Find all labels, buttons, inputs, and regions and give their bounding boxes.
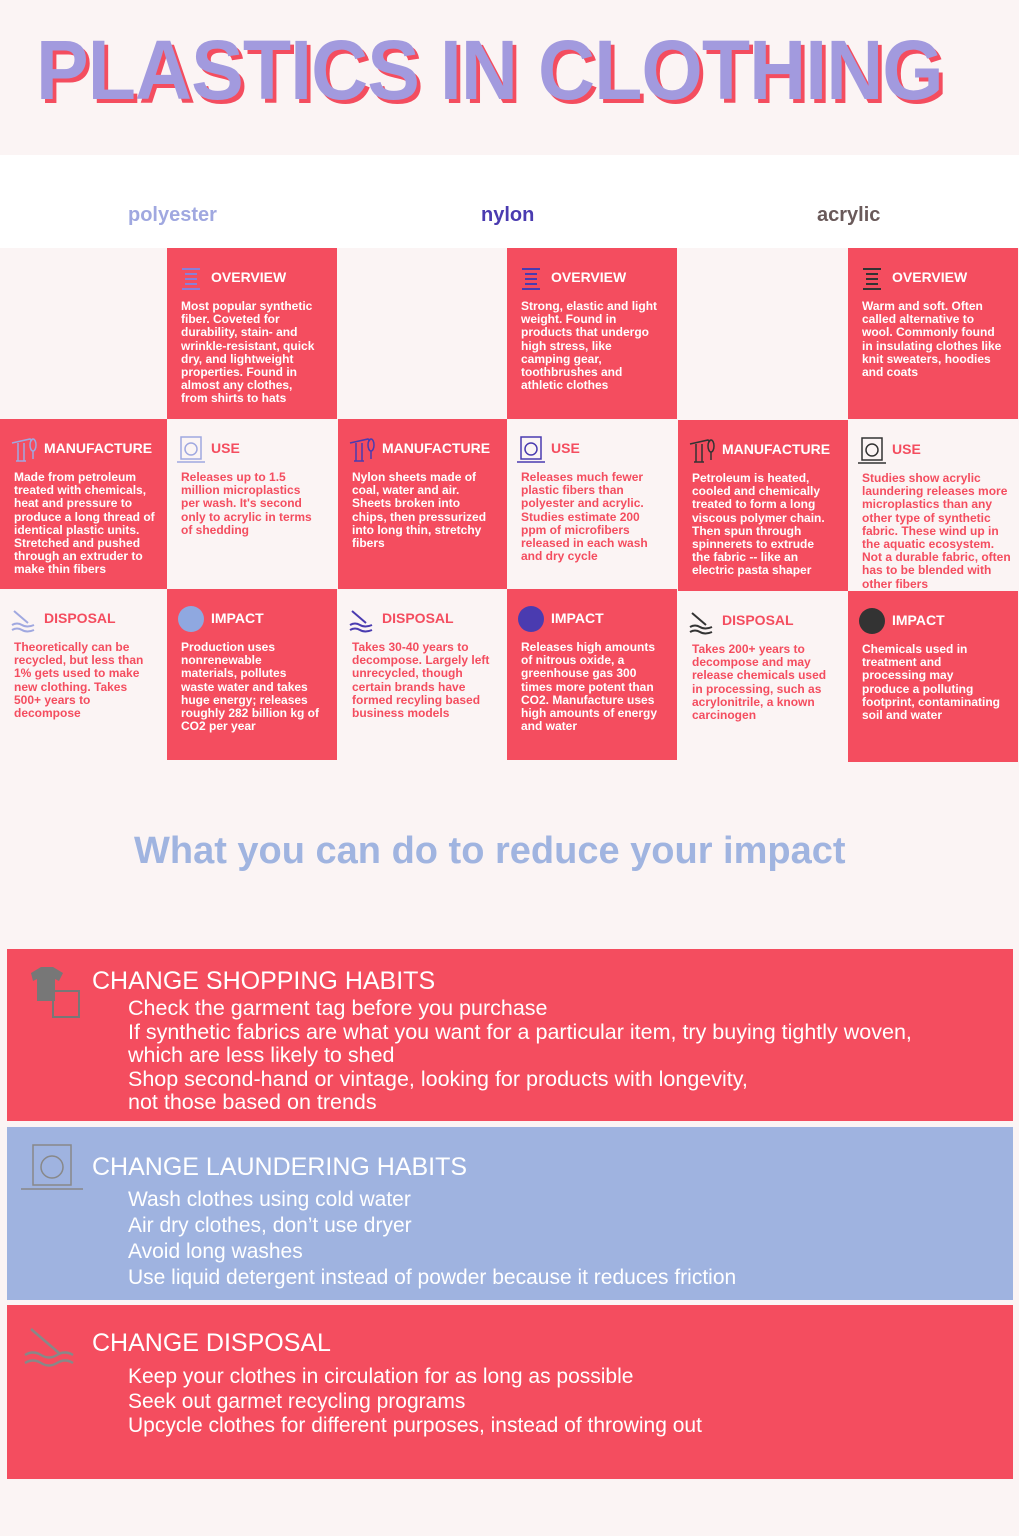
nylon impact <box>507 589 677 760</box>
polyester use <box>167 419 337 590</box>
nylon disposal: Takes 30-40 years to decompose. Largely left unrecycled, though certain brands have formed recyling based business models <box>352 640 489 720</box>
polyester overview: OVERVIEW <box>211 269 286 285</box>
acrylic disposal <box>678 591 848 762</box>
polyester overview: Most popular synthetic fiber. Coveted for durability, stain- and wrinkle-resistant, quick dry, and lightweight properties. Found in almost any clothes, from shirts to hats <box>181 299 314 405</box>
icon: shirt <box>31 967 80 1018</box>
panel: disposal: Seek out garmet recycling programs <box>128 1390 465 1412</box>
polyester impact: IMPACT <box>211 610 264 626</box>
panel: laundering: CHANGE LAUNDERING HABITS <box>92 1153 467 1181</box>
acrylic impact: Chemicals used in treatment and processing may produce a polluting footprint, contaminating soil and water <box>862 642 1000 722</box>
panel: shopping: If synthetic fabrics are what you want for a particular item, try buying tightly woven, <box>128 1020 912 1044</box>
polyester use: USE <box>211 440 240 456</box>
panel: shopping: Check the garment tag before you purchase <box>128 996 548 1020</box>
nylon use <box>507 419 677 590</box>
panel: laundering <box>7 1127 1013 1300</box>
label: nylon: nylon <box>481 204 534 226</box>
panel: laundering: Use liquid detergent instead of powder because it reduces friction <box>128 1266 736 1289</box>
nylon manufacture: MANUFACTURE <box>382 440 490 456</box>
nylon manufacture: Nylon sheets made of coal, water and air. Sheets broken into chips, then pressurized into long thin, stretchy fibers <box>352 470 486 550</box>
acrylic manufacture: Petroleum is heated, cooled and chemically treated to form a long viscous polymer chain. Then spun through spinnerets to extrude the fabric -- like an electric pasta shaper <box>692 471 825 577</box>
nylon manufacture <box>338 419 508 590</box>
label: acrylic: acrylic <box>817 204 880 226</box>
title: PLASTICS IN CLOTHING <box>36 23 943 117</box>
acrylic disposal: Takes 200+ years to decompose and may release chemicals used in processing, such as acrylonitrile, a known carcinogen <box>692 642 826 722</box>
nylon impact: Releases high amounts of nitrous oxide, a greenhouse gas 300 times more potent than CO2. Manufacture uses high amounts of energy and water <box>521 640 657 733</box>
nylon disposal <box>338 589 508 760</box>
acrylic use <box>848 420 1018 591</box>
nylon overview: OVERVIEW <box>551 269 626 285</box>
nylon use: Releases much fewer plastic fibers than polyester and acrylic. Studies estimate 200 ppm of microfibers released in each wash and dry cycle <box>521 470 648 563</box>
icon: bottle in water <box>24 1328 74 1367</box>
panel: disposal <box>7 1305 1013 1479</box>
polyester disposal: DISPOSAL <box>44 610 116 626</box>
acrylic manufacture <box>678 420 848 591</box>
panel: disposal: Upcycle clothes for different purposes, instead of throwing out <box>128 1414 702 1437</box>
acrylic use: USE <box>892 441 921 457</box>
polyester manufacture: MANUFACTURE <box>44 440 152 456</box>
acrylic overview <box>848 248 1018 419</box>
polyester use: Releases up to 1.5 million microplastics per wash. It's second only to acrylic in terms of shedding <box>181 470 312 537</box>
polyester disposal <box>0 589 170 760</box>
polyester manufacture: Made from petroleum treated with chemicals, heat and pressure to produce a long thread of identical plastic units. Stretched and pushed through an extruder to make thin fibers <box>14 470 155 576</box>
acrylic impact: IMPACT <box>892 612 945 628</box>
acrylic overview: Warm and soft. Often called alternative to wool. Commonly found in insulating clothes like knit sweaters, hoodies and coats <box>862 299 1001 379</box>
nylon impact: IMPACT <box>551 610 604 626</box>
acrylic disposal: DISPOSAL <box>722 612 794 628</box>
subheading: What you can do to reduce your impact <box>134 830 846 872</box>
icon: washer <box>21 1144 83 1190</box>
polyester overview <box>167 248 337 419</box>
polyester manufacture <box>0 419 170 590</box>
polyester impact <box>167 589 337 760</box>
nylon overview: Strong, elastic and light weight. Found in products that undergo high stress, like camping gear, toothbrushes and athletic clothes <box>521 299 657 392</box>
polyester disposal: Theoretically can be recycled, but less than 1% gets used to make new clothing. Takes 500+ years to decompose <box>14 640 143 720</box>
header row <box>0 155 1019 248</box>
polyester impact: Production uses nonrenewable materials, pollutes waste water and takes huge energy; releases roughly 282 billion kg of CO2 per year <box>181 640 319 733</box>
nylon disposal: DISPOSAL <box>382 610 454 626</box>
panel: shopping: not those based on trends <box>128 1090 377 1114</box>
panel: laundering: Avoid long washes <box>128 1240 303 1263</box>
acrylic manufacture: MANUFACTURE <box>722 441 830 457</box>
acrylic use: Studies show acrylic laundering releases more microplastics than any other type of synthetic fabric. These wind up in the aquatic ecosystem. Not a durable fabric, often has to be blended with other fibers <box>862 471 1011 591</box>
label: polyester: polyester <box>128 204 217 226</box>
panel: shopping: Shop second-hand or vintage, looking for products with longevity, <box>128 1066 748 1090</box>
acrylic overview: OVERVIEW <box>892 269 967 285</box>
nylon use: USE <box>551 440 580 456</box>
nylon overview <box>507 248 677 419</box>
panel: shopping: which are less likely to shed <box>128 1043 394 1067</box>
panel: disposal: Keep your clothes in circulation for as long as possible <box>128 1365 633 1388</box>
panel: laundering: Air dry clothes, don’t use dryer <box>128 1214 412 1237</box>
panel: shopping <box>7 949 1013 1121</box>
panel: laundering: Wash clothes using cold water <box>128 1188 411 1211</box>
panel: disposal: CHANGE DISPOSAL <box>92 1329 331 1357</box>
panel: shopping: CHANGE SHOPPING HABITS <box>92 967 435 995</box>
acrylic impact <box>848 591 1018 762</box>
